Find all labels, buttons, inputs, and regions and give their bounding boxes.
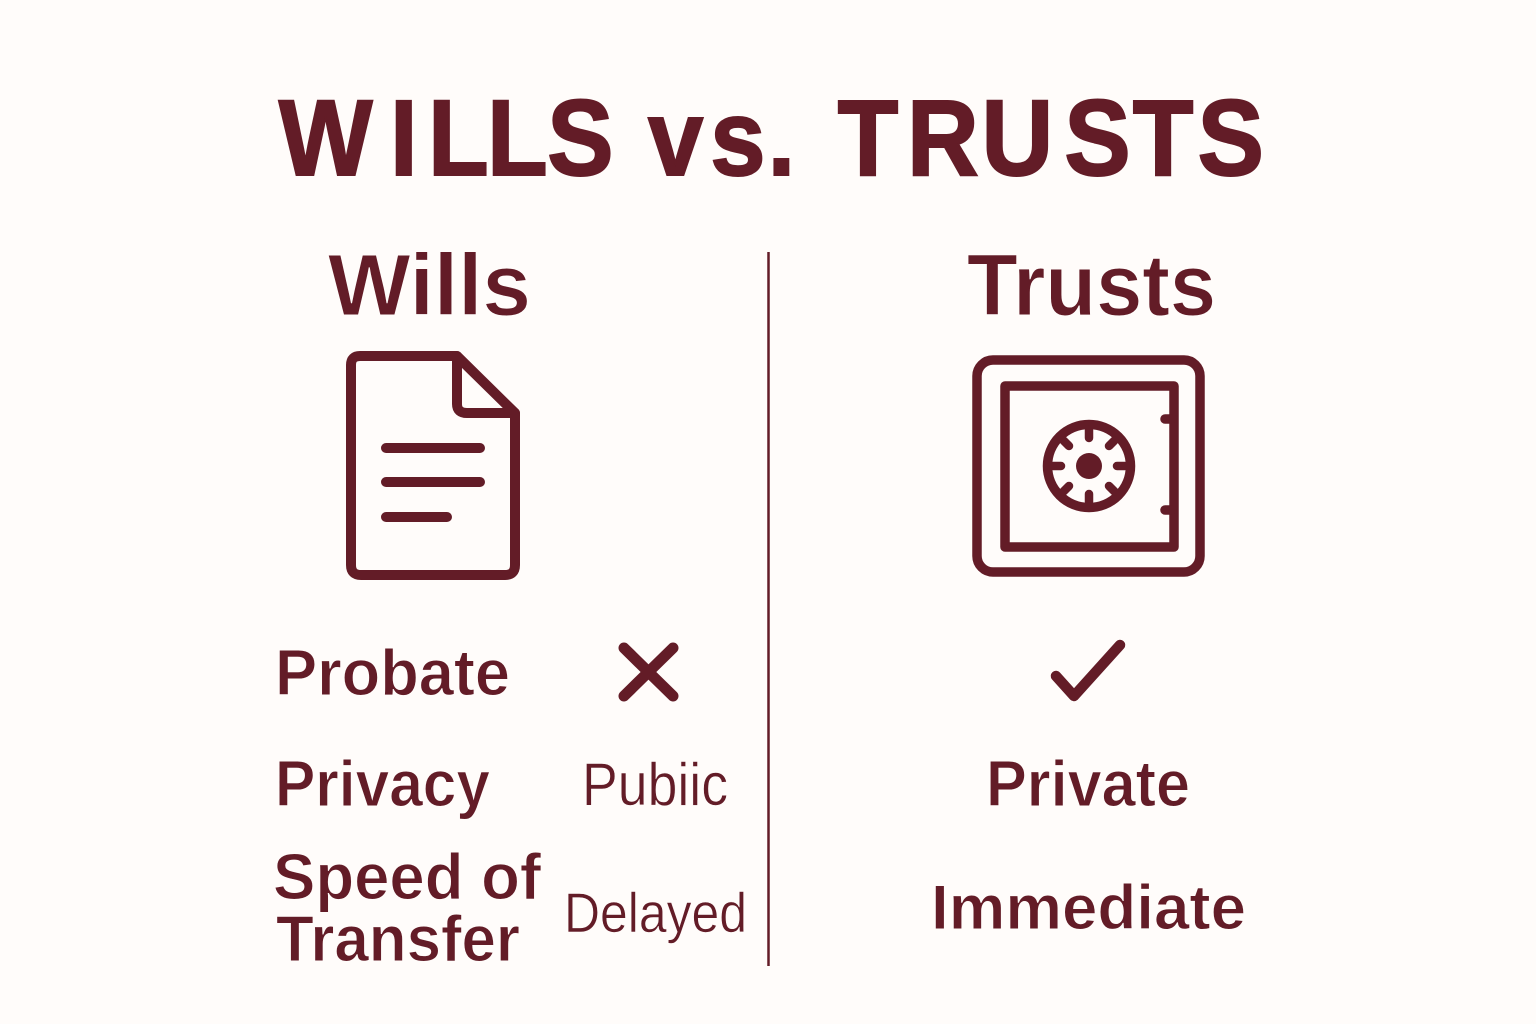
heading: wills: Wills [328, 237, 531, 334]
icon: document [351, 356, 515, 575]
row label: speed of transfer [273, 840, 541, 975]
row label: speed of transfer: Speed of [273, 840, 541, 913]
row label: privacy: Privacy [275, 747, 490, 820]
value: delayed: Delayed [564, 881, 747, 944]
title: WILLS vs. TRUSTS [279, 77, 1264, 198]
value: private: Private [986, 747, 1190, 820]
value: immediate: Immediate [931, 873, 1246, 943]
panel: trusts [931, 237, 1246, 943]
heading: trusts: Trusts [967, 237, 1216, 334]
icon: safe [977, 360, 1200, 572]
value: public: Pubiic [582, 751, 728, 818]
panel: wills [273, 237, 747, 975]
icon: cross [624, 648, 673, 696]
center divider [767, 252, 770, 966]
row label: probate: Probate [275, 636, 510, 709]
row label: speed of transfer: Transfer [276, 902, 520, 975]
icon: check mark [1056, 645, 1120, 696]
